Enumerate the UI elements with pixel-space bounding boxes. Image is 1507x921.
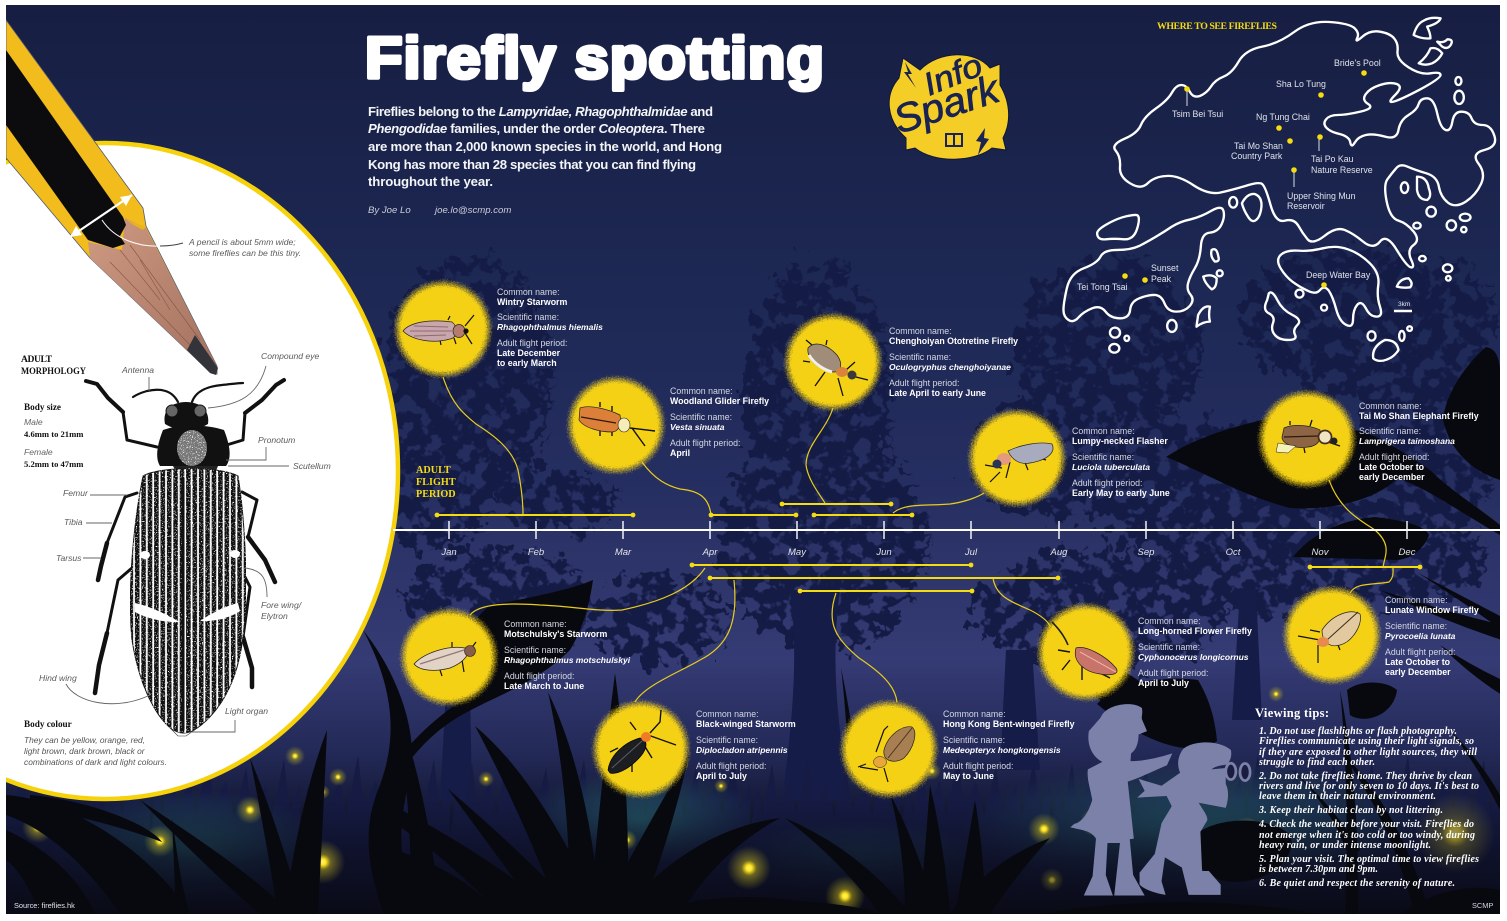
firefly circle: Woodland Glider Firefly [566, 375, 666, 475]
timeline: Nov [1312, 547, 1330, 558]
map heading: WHERE TO SEE FIREFLIES [1157, 21, 1278, 32]
Hong Kong map: Tai Po Kau [1311, 154, 1354, 164]
Hong Kong map: Upper Shing Mun [1287, 191, 1356, 201]
Hong Kong map: Sunset [1151, 263, 1179, 273]
morphology labels and leader lines: Pronotum [258, 435, 295, 445]
black foreground grass and leaves [6, 347, 1502, 914]
firefly circle: Wintry Starworm [393, 279, 493, 379]
Hong Kong map: 3km [1398, 301, 1410, 308]
intro paragraph: Phengodidae families, under the order Coleoptera. There [368, 121, 705, 136]
viewing tips [1255, 706, 1479, 889]
Hong Kong map: Deep Water Bay [1306, 270, 1371, 280]
label: Long-horned Flower Firefly: Adult flight period: [1138, 668, 1208, 678]
viewing tips: 2. Do not take fireflies home. They thrive by clean [1258, 771, 1472, 782]
label: Chenghoiyan Ototretine Firefly: Adult flight period: [889, 378, 959, 388]
body size: 4.6mm to 21mm [24, 429, 84, 439]
label: Wintry Starworm: to early March [497, 358, 557, 368]
label: Woodland Glider Firefly: April [670, 448, 690, 458]
firefly circle: Chenghoiyan Ototretine Firefly [783, 312, 883, 412]
intro paragraph: are more than 2,000 known species in the world, and Hong [368, 139, 722, 154]
body colour [24, 719, 167, 767]
viewing tips: 3. Keep their habitat clean by not littering. [1258, 805, 1443, 816]
label: Tai Mo Shan Elephant Firefly: Lamprigera taimoshana [1359, 436, 1455, 446]
morphology labels and leader lines: Scutellum [293, 461, 331, 471]
label: Lumpy-necked Flasher: Luciola tuberculata [1072, 462, 1150, 472]
firefly circle: Motschulsky's Starworm [399, 607, 499, 707]
label: Black-winged Starworm: Common name: [696, 709, 759, 719]
morphology labels and leader lines: Femur [63, 488, 89, 498]
intro paragraph: Kong has more than 28 species that you can find flying [368, 157, 696, 172]
viewing tips: leave them in their natural environment. [1259, 791, 1436, 802]
Hong Kong map: Tai Mo Shan [1234, 141, 1283, 151]
background grass [6, 756, 1500, 879]
adult morphology heading [21, 356, 86, 374]
label: Wintry Starworm: Rhagophthalmus hiemalis [497, 322, 603, 332]
intro paragraph: throughout the year. [368, 174, 493, 189]
label: Lunate Window Firefly: Pyrocoelia lunata [1385, 631, 1456, 641]
viewing tips: 1. Do not use flashlights or flash photography. [1259, 726, 1457, 737]
label: Lunate Window Firefly: early December [1385, 667, 1451, 677]
Hong Kong map: Tsim Bei Tsui [1172, 109, 1223, 119]
intro paragraph [368, 104, 722, 189]
Hong Kong map: Ng Tung Chai [1256, 112, 1310, 122]
timeline: Apr [702, 547, 718, 558]
viewing tips: if they are exposed to other light sources, they will [1259, 747, 1477, 758]
label: Hong Kong Bent-winged Firefly: Scientific name: [943, 735, 1005, 745]
Hong Kong map [1063, 18, 1495, 361]
label: Lunate Window Firefly: Lunate Window Firefly [1385, 605, 1479, 615]
label: Black-winged Starworm: Diplocladon atripennis [696, 745, 788, 755]
label: Lumpy-necked Flasher: Lumpy-necked Flasher [1072, 436, 1168, 446]
label: Lumpy-necked Flasher: Scientific name: [1072, 452, 1134, 462]
label: Hong Kong Bent-winged Firefly: Hong Kong Bent-winged Firefly [943, 719, 1075, 729]
label: Lunate Window Firefly: Adult flight period: [1385, 647, 1455, 657]
children silhouette [1070, 704, 1250, 896]
adult morphology heading: ADULT [21, 354, 53, 365]
viewing tips: not emerge when it's too cold or too windy, during [1259, 830, 1475, 841]
viewing tips: rivers and live for only seven to 10 days. It's best to [1259, 781, 1479, 792]
viewing tips: 6. Be quiet and respect the serenity of nature. [1259, 878, 1455, 889]
adult flight period label: FLIGHT [416, 477, 456, 488]
morphology labels and leader lines: Antenna [121, 365, 154, 375]
label: Long-horned Flower Firefly: Scientific name: [1138, 642, 1200, 652]
viewing tips: Viewing tips: [1255, 706, 1329, 720]
label: Long-horned Flower Firefly: Long-horned Flower Firefly [1138, 626, 1252, 636]
label: Chenghoiyan Ototretine Firefly: Chenghoiyan Ototretine Firefly [889, 336, 1018, 346]
viewing tips: 4. Check the weather before your visit. Fireflies do [1258, 819, 1474, 830]
Hong Kong map: Bride's Pool [1334, 58, 1381, 68]
label: Tai Mo Shan Elephant Firefly: Scientific name: [1359, 426, 1421, 436]
viewing tips: struggle to find each other. [1258, 757, 1375, 768]
Hong Kong map: Sha Lo Tung [1276, 79, 1326, 89]
label: Chenghoiyan Ototretine Firefly: Scientific name: [889, 352, 951, 362]
pencil [6, 20, 218, 375]
adult flight period label: ADULT [416, 465, 451, 476]
body size: Female [24, 447, 53, 457]
label: Tai Mo Shan Elephant Firefly: Adult flight period: [1359, 452, 1429, 462]
label: Wintry Starworm: Scientific name: [497, 312, 559, 322]
label: Woodland Glider Firefly: Adult flight period: [670, 438, 740, 448]
morphology labels and leader lines: Tarsus [56, 553, 82, 563]
label: Woodland Glider Firefly: Woodland Glider Firefly [670, 396, 769, 406]
timeline: Jan [440, 547, 457, 558]
label: Hong Kong Bent-winged Firefly: May to June [943, 771, 994, 781]
firefly circle: Tai Mo Shan Elephant Firefly [1257, 389, 1357, 489]
viewing tips: Fireflies communicate using their light signals, so [1258, 736, 1474, 747]
label: Motschulsky's Starworm: Motschulsky's Starworm [504, 629, 607, 639]
label: Tai Mo Shan Elephant Firefly: Late October to [1359, 462, 1425, 472]
timeline: May [788, 547, 807, 558]
firefly circle: Lumpy-necked Flasher [967, 408, 1067, 508]
body size: Male [24, 417, 43, 427]
label: Motschulsky's Starworm: Common name: [504, 619, 567, 629]
firefly circle: Hong Kong Bent-winged Firefly [839, 699, 939, 799]
viewing tips: is between 7.30pm and 9pm. [1259, 864, 1378, 875]
morphology labels and leader lines: Elytron [261, 611, 288, 621]
morphology labels and leader lines [39, 351, 331, 732]
label: Lumpy-necked Flasher: Adult flight period: [1072, 478, 1142, 488]
label: Tai Mo Shan Elephant Firefly: early December [1359, 472, 1425, 482]
label: Lunate Window Firefly: Common name: [1385, 595, 1448, 605]
label: Lunate Window Firefly: Late October to [1385, 657, 1451, 667]
child with binoculars [1137, 742, 1231, 895]
teal ground glow [96, 772, 1394, 874]
label: Chenghoiyan Ototretine Firefly: Late April to early June [889, 388, 986, 398]
label: Wintry Starworm: Common name: [497, 287, 560, 297]
pencil caption [188, 239, 300, 258]
Hong Kong map: Peak [1151, 274, 1172, 284]
label: Long-horned Flower Firefly: April to July [1138, 678, 1189, 688]
body colour: combinations of dark and light colours. [24, 757, 167, 767]
firefly glows [22, 686, 1495, 916]
label: Motschulsky's Starworm: Scientific name: [504, 645, 566, 655]
map coastline [1063, 18, 1495, 361]
timeline: Dec [1399, 547, 1416, 558]
pencil caption: A pencil is about 5mm wide; [188, 237, 296, 247]
body colour: Body colour [24, 719, 72, 729]
body colour: light brown, dark brown, black or [24, 746, 146, 756]
binoculars [1226, 763, 1250, 781]
viewing tips: 5. Plan your visit. The optimal time to view fireflies [1259, 854, 1479, 865]
timeline: Jun [875, 547, 892, 558]
intro paragraph: Fireflies belong to the Lampyridae, Rhagophthalmidae and [368, 104, 713, 119]
beetle illustration [86, 380, 284, 736]
label: Chenghoiyan Ototretine Firefly: Oculogryphus chenghoiyanae [889, 362, 1011, 372]
label: Chenghoiyan Ototretine Firefly: Common name: [889, 326, 952, 336]
Info Spark badge: Info [918, 47, 987, 102]
label: Motschulsky's Starworm: Adult flight period: [504, 671, 574, 681]
timeline: Jul [964, 547, 978, 558]
title: Firefly spotting [365, 26, 825, 91]
flight period bars [435, 502, 1422, 593]
label: Motschulsky's Starworm: Rhagophthalmus motschulskyi [504, 655, 631, 665]
Hong Kong map: Reservoir [1287, 201, 1325, 211]
byline: joe.lo@scmp.com [433, 205, 511, 216]
label: Wintry Starworm: Adult flight period: [497, 338, 567, 348]
label: Black-winged Starworm: April to July [696, 771, 747, 781]
body size: Body size [24, 402, 61, 412]
label: Lunate Window Firefly: Scientific name: [1385, 621, 1447, 631]
viewing tips: heavy rain, or under intense moonlight. [1259, 840, 1431, 851]
firefly circle: Lunate Window Firefly [1282, 585, 1382, 685]
label: Black-winged Starworm: Adult flight period: [696, 761, 766, 771]
morphology labels and leader lines: Hind wing [39, 673, 77, 683]
morphology labels and leader lines: Fore wing/ [261, 600, 303, 610]
adult flight period label: PERIOD [416, 489, 456, 500]
label: Motschulsky's Starworm: Late March to June [504, 681, 584, 691]
label: Long-horned Flower Firefly: Cyphonocerus longicornus [1138, 652, 1249, 662]
label: Black-winged Starworm: Black-winged Starworm [696, 719, 796, 729]
timeline: Mar [615, 547, 632, 558]
firefly circle: Long-horned Flower Firefly [1036, 602, 1136, 702]
Hong Kong map: Country Park [1231, 151, 1283, 161]
timeline: Oct [1226, 547, 1241, 558]
SCMP credit: SCMP [1472, 901, 1493, 910]
label: Black-winged Starworm: Scientific name: [696, 735, 758, 745]
morphology labels and leader lines: Light organ [225, 706, 268, 716]
byline: By Joe Lo [368, 205, 411, 216]
label: Wintry Starworm: Wintry Starworm [497, 297, 567, 307]
label: Woodland Glider Firefly: Common name: [670, 386, 733, 396]
child pointing [1070, 704, 1172, 896]
adult flight period label [416, 466, 456, 497]
label: Hong Kong Bent-winged Firefly: Adult flight period: [943, 761, 1013, 771]
timeline: Sep [1138, 547, 1154, 558]
label: Hong Kong Bent-winged Firefly: Medeopteryx hongkongensis [943, 745, 1061, 755]
adult morphology heading: MORPHOLOGY [21, 366, 86, 377]
tree trunks [440, 590, 1262, 800]
body size: 5.2mm to 47mm [24, 459, 84, 469]
connector lines [443, 377, 1393, 702]
timeline [393, 521, 1500, 558]
label: Lumpy-necked Flasher: Early May to early June [1072, 488, 1170, 498]
white morphology circle [0, 143, 398, 799]
timeline: Aug [1050, 547, 1068, 558]
body size [24, 402, 84, 469]
label: Lumpy-necked Flasher: Common name: [1072, 426, 1135, 436]
label: Wintry Starworm: Late December [497, 348, 561, 358]
timeline: Feb [528, 547, 544, 558]
ground shading [6, 800, 1500, 914]
tree silhouettes [360, 245, 1500, 670]
Hong Kong map: Tei Tong Tsai [1077, 282, 1128, 292]
Info Spark badge: Spark [888, 67, 1006, 143]
Info Spark badge [888, 47, 1009, 159]
label: Tai Mo Shan Elephant Firefly: Common name: [1359, 401, 1422, 411]
morphology labels and leader lines: Tibia [64, 517, 83, 527]
pencil caption: some fireflies can be this tiny. [189, 248, 301, 258]
label: Tai Mo Shan Elephant Firefly: Tai Mo Shan Elephant Firefly [1359, 411, 1479, 421]
label: Woodland Glider Firefly: Scientific name: [670, 412, 732, 422]
label: Hong Kong Bent-winged Firefly: Common name: [943, 709, 1006, 719]
firefly circle: Black-winged Starworm [591, 699, 691, 799]
byline [368, 206, 511, 215]
morphology labels and leader lines: Compound eye [261, 351, 320, 361]
Hong Kong map: Nature Reserve [1311, 165, 1373, 175]
label: Long-horned Flower Firefly: Common name: [1138, 616, 1201, 626]
body colour: They can be yellow, orange, red, [24, 735, 145, 745]
source credit: Source: fireflies.hk [14, 901, 75, 910]
label: Woodland Glider Firefly: Vesta sinuata [670, 422, 725, 432]
